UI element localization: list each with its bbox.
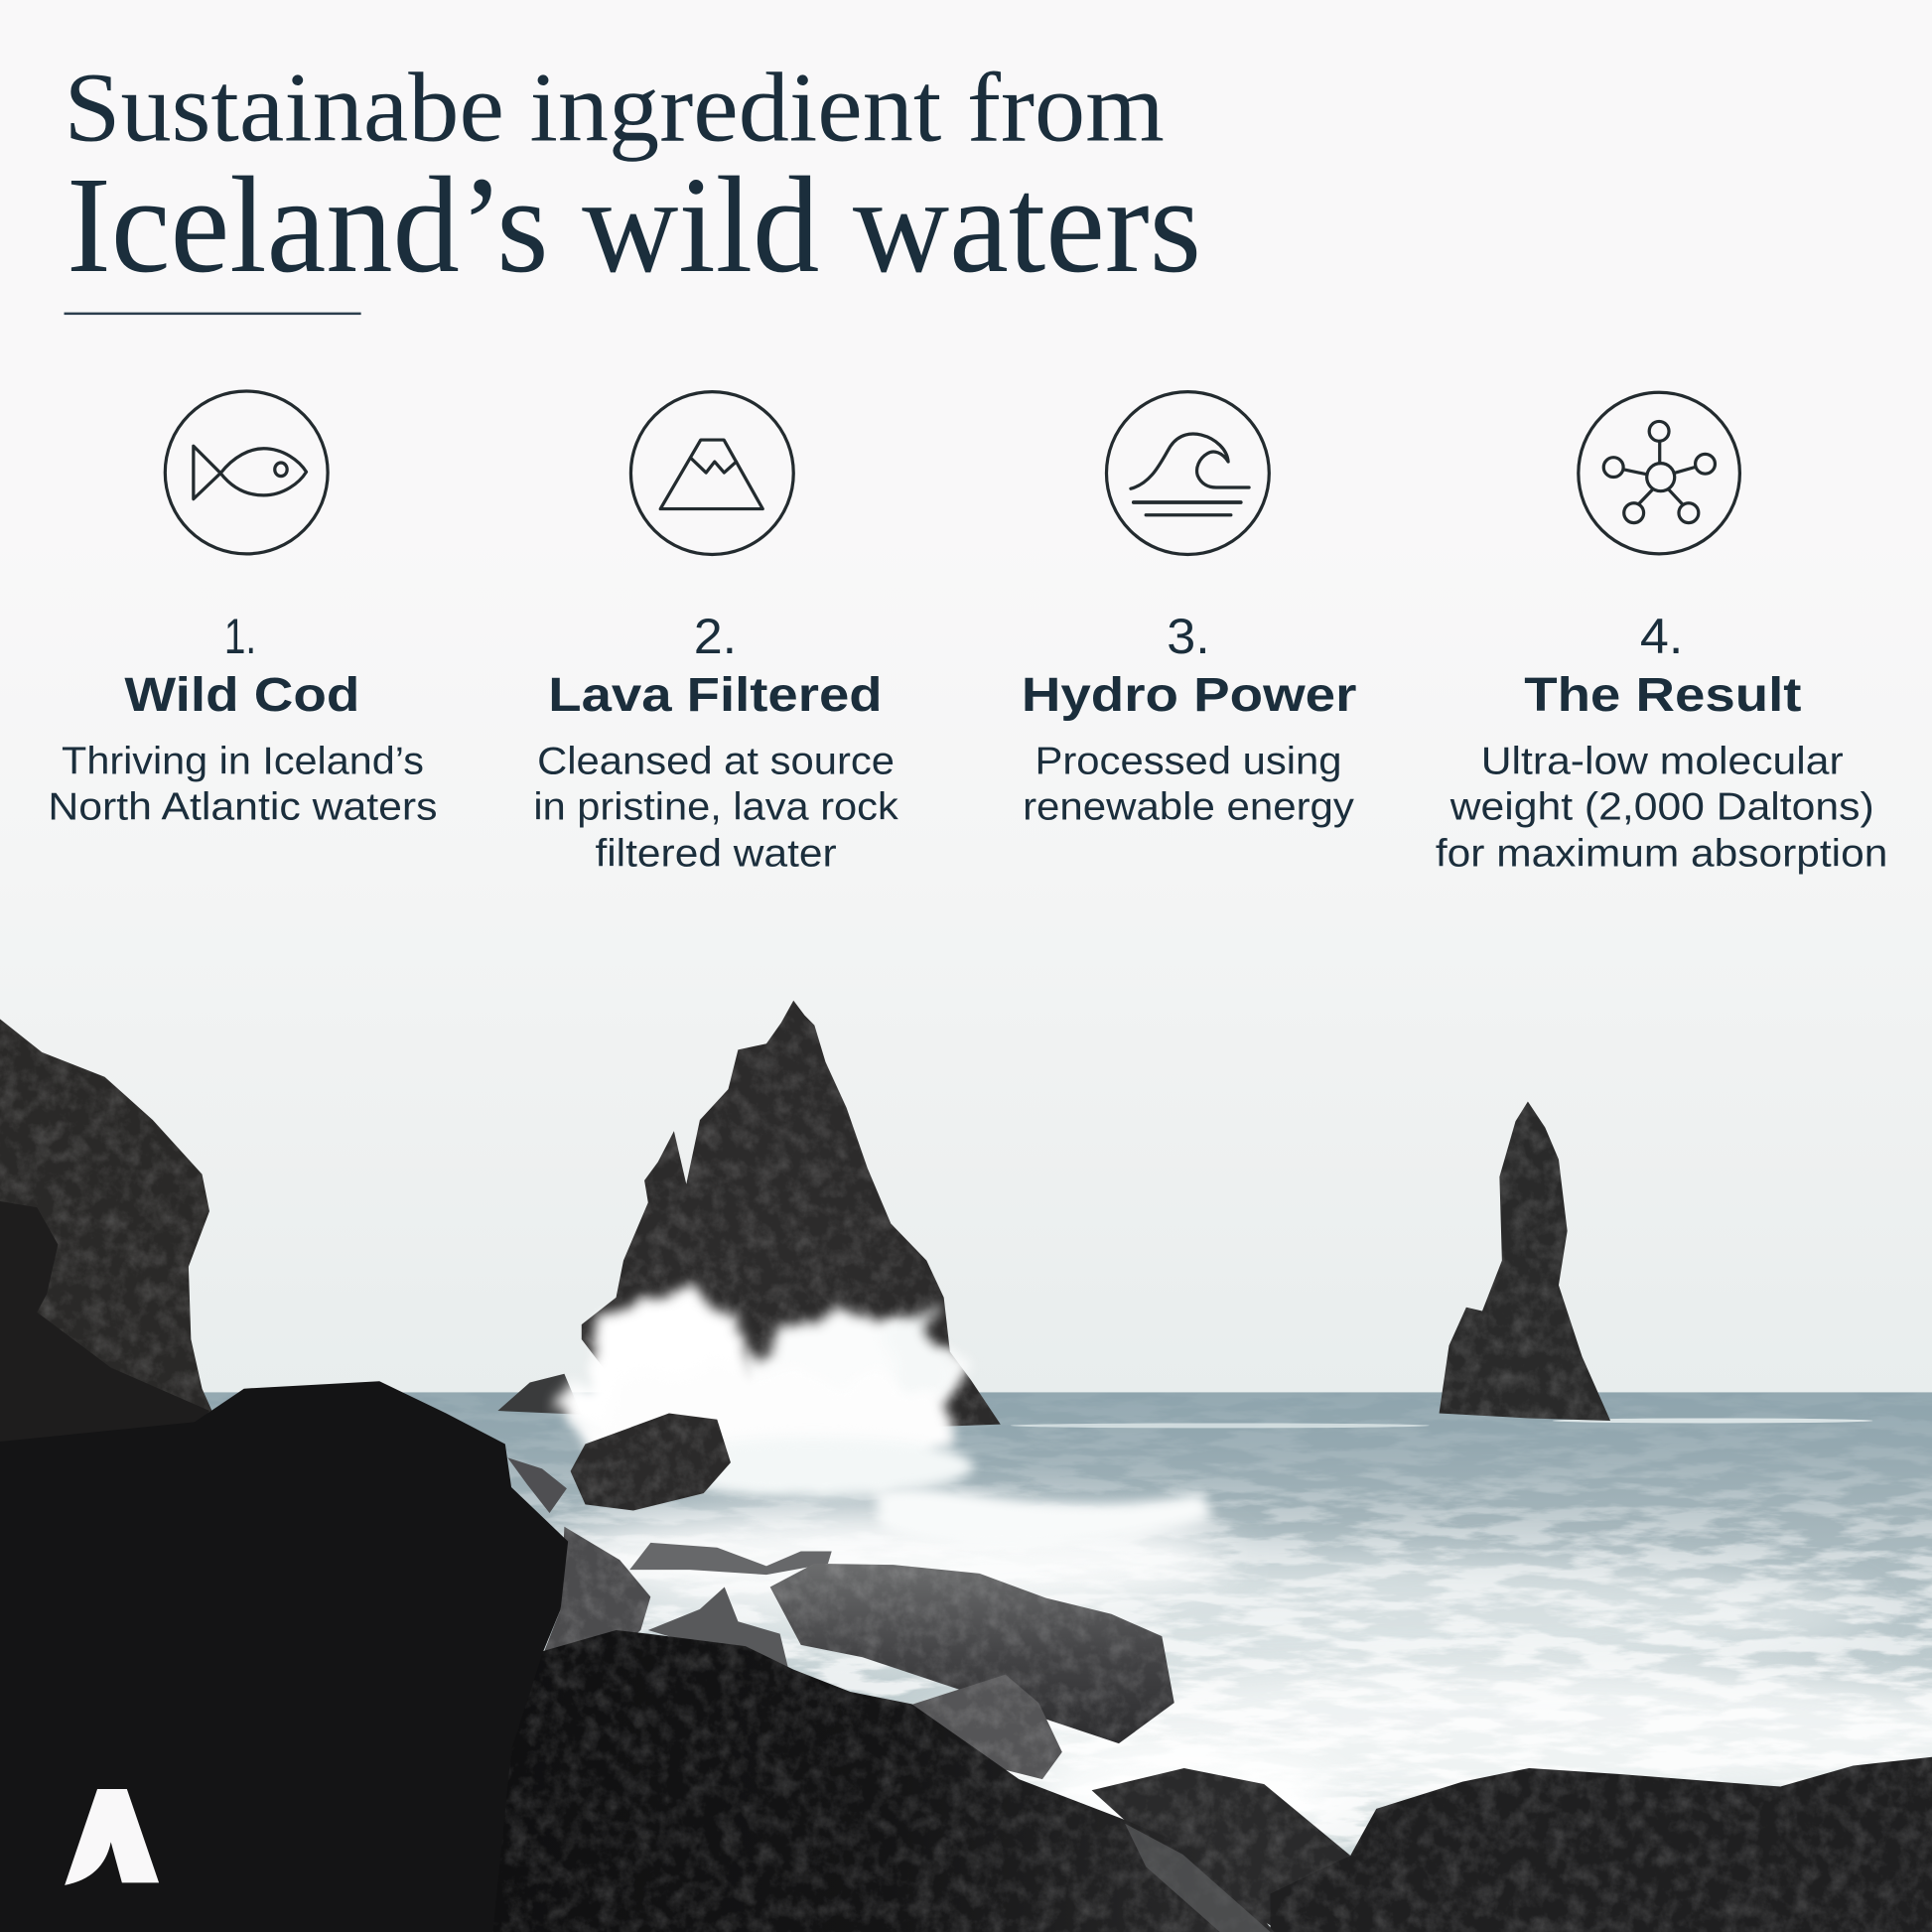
column 3: hydro power bbox=[1022, 392, 1357, 828]
description bbox=[1023, 740, 1355, 828]
left cliff shadow bbox=[0, 1201, 209, 1466]
title underline bbox=[65, 313, 361, 315]
rock: textured bbox=[905, 1675, 1062, 1779]
sea stack: small left bbox=[497, 1374, 582, 1415]
heading: Wild Cod: Wild Cod bbox=[124, 668, 359, 722]
rock: behind boulder bbox=[543, 1527, 650, 1654]
rock: mid dark bbox=[1092, 1768, 1350, 1932]
rock: lower foreground bbox=[492, 1630, 1274, 1932]
column 4: the result bbox=[1436, 392, 1887, 875]
rock: small grey bbox=[507, 1457, 567, 1513]
rock: flat grey bbox=[629, 1543, 832, 1575]
left cliff bbox=[0, 1019, 211, 1516]
rock: right foreground bbox=[1271, 1757, 1932, 1932]
description bbox=[48, 740, 438, 828]
photograph: Icelandic sea stacks and rocky shore bbox=[0, 1001, 1932, 1932]
description: Cleansed at source bbox=[537, 740, 895, 782]
title bbox=[65, 54, 1201, 302]
heading: Hydro Power: Hydro Power bbox=[1022, 668, 1357, 722]
column 1: wild cod bbox=[48, 391, 438, 828]
description: filtered water bbox=[595, 832, 837, 875]
description: North Atlantic waters bbox=[48, 785, 438, 828]
logo bbox=[65, 1789, 159, 1885]
rock: grey slab bbox=[770, 1564, 1174, 1743]
title line 2: Iceland’s wild waters bbox=[67, 149, 1201, 302]
icon: volcano bbox=[630, 392, 793, 554]
column 2: lava filtered bbox=[533, 392, 899, 875]
icon: fish bbox=[165, 391, 328, 554]
description bbox=[1436, 740, 1887, 875]
icon: wave bbox=[1106, 392, 1269, 554]
description: renewable energy bbox=[1023, 785, 1355, 828]
sea bbox=[204, 1392, 1932, 1928]
number 2: 2. bbox=[694, 609, 737, 664]
sea stack: large central bbox=[582, 1001, 1001, 1430]
breaking wave bbox=[875, 1488, 1213, 1546]
wave spray bbox=[567, 1294, 973, 1496]
description bbox=[533, 740, 899, 875]
description: Thriving in Iceland’s bbox=[62, 740, 424, 782]
number 1: 1. bbox=[224, 609, 256, 664]
heading: The Result: The Result bbox=[1524, 668, 1801, 722]
number 3: 3. bbox=[1167, 609, 1210, 664]
sea stack: tall right bbox=[1440, 1102, 1610, 1421]
description: weight (2,000 Daltons) bbox=[1449, 785, 1874, 828]
title line 1: Sustainabe ingredient from bbox=[65, 54, 1165, 162]
rock: small wet bbox=[648, 1587, 788, 1670]
rock: wet stream bbox=[1125, 1824, 1271, 1932]
rock: big dark foreground bbox=[0, 1381, 568, 1932]
description: in pristine, lava rock bbox=[533, 785, 899, 828]
heading: Lava Filtered: Lava Filtered bbox=[548, 668, 883, 722]
description: for maximum absorption bbox=[1436, 832, 1887, 875]
rock: boulder in surf bbox=[571, 1414, 731, 1511]
number 4: 4. bbox=[1640, 609, 1683, 664]
icon: molecule bbox=[1579, 392, 1739, 554]
page background and sky bbox=[0, 0, 1932, 1399]
description: Processed using bbox=[1035, 740, 1342, 782]
description: Ultra-low molecular bbox=[1481, 740, 1844, 782]
